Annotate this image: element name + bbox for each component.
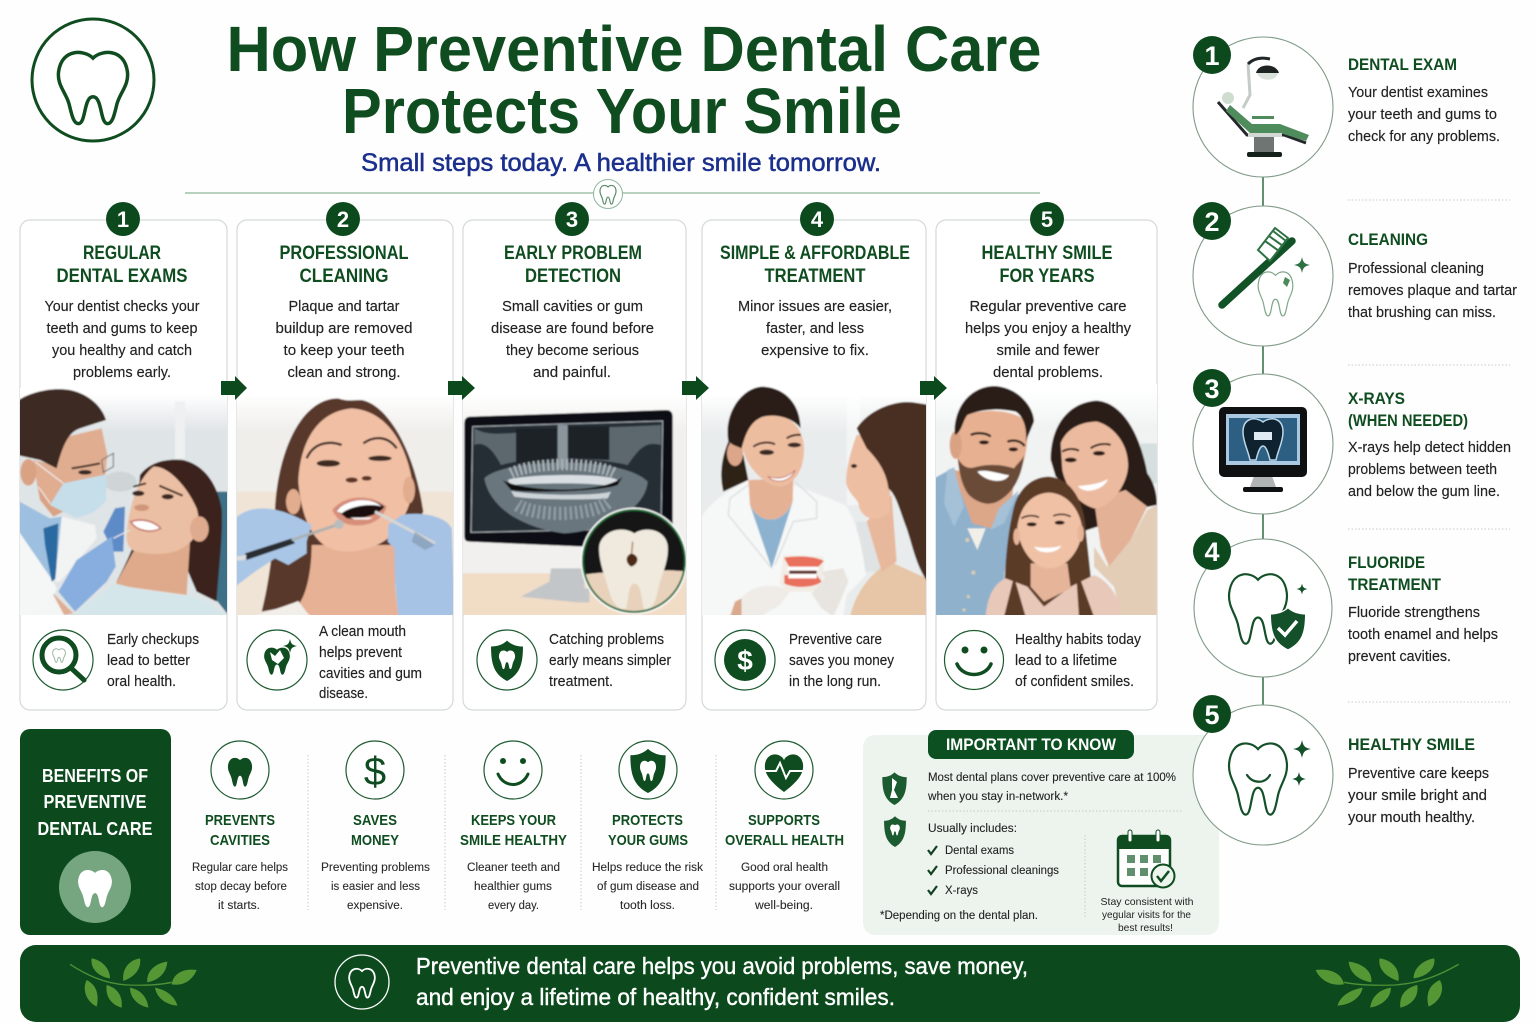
icon: shield 2: [884, 816, 906, 847]
heading: [280, 243, 409, 287]
benefit: keeps your smile healthy: [460, 741, 567, 912]
text: DENTAL EXAM: [1348, 55, 1457, 74]
note: disease.: [319, 686, 368, 702]
benefit: keeps your smile healthy: SMILE HEALTHY: [460, 832, 567, 849]
benefit: saves money: MONEY: [351, 832, 399, 849]
number badge 4: 4: [811, 207, 824, 232]
panel: important to know: Usually includes:: [928, 821, 1017, 835]
panel: important to know: [863, 730, 1219, 935]
step 4 fluoride treatment: [1193, 532, 1498, 677]
number badge: 2: [1204, 207, 1220, 237]
body text: [738, 298, 892, 359]
text: (WHEN NEEDED): [1348, 411, 1468, 430]
checklist: Professional cleanings: [945, 863, 1059, 877]
text: stay consistent: Stay consistent with: [1100, 896, 1194, 908]
note: lead to a lifetime: [1015, 653, 1117, 669]
arrow 1: [221, 376, 247, 400]
icon: tooth circle: [335, 955, 389, 1009]
benefit: prevents cavities: it starts.: [218, 898, 260, 912]
footer text: and enjoy a lifetime of healthy, confident smiles.: [416, 984, 895, 1010]
icon: dental chair: [1218, 58, 1309, 157]
text: your mouth healthy.: [1348, 810, 1475, 826]
note: Catching problems: [549, 632, 664, 648]
body text: faster, and less: [766, 320, 864, 337]
heading: DETECTION: [525, 266, 621, 287]
step 3 x-rays: [1193, 369, 1511, 514]
benefit: keeps your smile healthy: healthier gums: [474, 879, 552, 893]
icon: dollar: $: [737, 645, 753, 676]
number badge: [1193, 532, 1231, 570]
number badge 3: 3: [566, 207, 578, 232]
icon: magnifier: [33, 630, 93, 690]
text: CLEANING: [1348, 230, 1428, 249]
arrow 2: [448, 376, 475, 400]
photo: dentist showing dental model: [700, 385, 930, 618]
icon: smiling tooth: [1229, 740, 1311, 815]
text: X-rays help detect hidden: [1348, 440, 1511, 456]
benefit: saves money: $: [364, 750, 386, 794]
body text: they become serious: [506, 342, 639, 359]
text: [1348, 230, 1517, 321]
icon: shield 1: [882, 772, 907, 805]
icon: tooth with sparkle: [247, 630, 307, 690]
benefit: protects your gums: of gum disease and: [597, 879, 699, 893]
heading: [56, 243, 188, 287]
benefit: prevents cavities: Regular care helps: [192, 860, 288, 874]
number badge: 5: [1204, 700, 1220, 730]
heading: [504, 243, 642, 287]
body text: Small cavities or gum: [502, 298, 643, 315]
subtitle: Small steps today. A healthier smile tomorrow.: [361, 149, 881, 177]
panel: step 2 professional cleaning: [235, 202, 455, 710]
body text: Minor issues are easier,: [738, 298, 892, 315]
benefit: keeps your smile healthy: KEEPS YOUR: [471, 812, 556, 829]
number badge 1: 1: [117, 207, 129, 232]
icon: shield tooth: [477, 630, 537, 690]
note: oral health.: [107, 674, 176, 690]
text: [1348, 389, 1511, 500]
panel: benefits of preventive dental care: [20, 729, 171, 935]
text: Your dentist examines: [1348, 85, 1488, 101]
icon: smiley: [944, 630, 1004, 690]
checklist: [928, 843, 1059, 897]
body text: [276, 298, 412, 381]
icon: leaves right: [1316, 958, 1459, 1008]
text: tooth enamel and helps: [1348, 627, 1498, 643]
benefit: supports overall health: Good oral health: [741, 860, 828, 874]
note: A clean mouth: [319, 624, 406, 640]
note: [107, 632, 199, 690]
benefit: protects your gums: YOUR GUMS: [608, 832, 688, 849]
text: and below the gum line.: [1348, 484, 1500, 500]
text: Fluoride strengthens: [1348, 605, 1480, 621]
note: helps prevent: [319, 645, 402, 661]
benefit: saves money: is easier and less: [331, 879, 420, 893]
number badge: 4: [1204, 537, 1220, 567]
body text: clean and strong.: [288, 364, 400, 381]
body text: teeth and gums to keep: [46, 320, 198, 337]
text: stay consistent: best results!: [1118, 922, 1173, 934]
icon: tooth and shield: [1229, 574, 1308, 650]
title: [226, 13, 1042, 147]
panel: step 4 simple and affordable treatment: [700, 202, 930, 710]
body text: [965, 298, 1131, 381]
icon: toothbrush and tooth: [1222, 228, 1310, 316]
note: [549, 632, 671, 690]
benefit: supports overall health: supports your overall: [729, 879, 840, 893]
heading: HEALTHY SMILE: [982, 243, 1112, 264]
heading: PROFESSIONAL: [280, 243, 409, 264]
benefit: saves money: SAVES: [353, 812, 397, 829]
body text: Your dentist checks your: [44, 298, 200, 315]
number badge: [1193, 202, 1231, 240]
body text: buildup are removed: [276, 320, 412, 337]
pill heading: [928, 730, 1134, 759]
heading: DENTAL EXAMS: [56, 266, 188, 287]
body text: problems early.: [73, 364, 171, 381]
benefit: keeps your smile healthy: every day.: [488, 898, 539, 912]
number badge 3: [555, 202, 589, 236]
benefit: supports overall health: [725, 741, 844, 912]
note: early means simpler: [549, 653, 671, 669]
note: Healthy habits today: [1015, 632, 1142, 648]
photo: smiling patient cleaning: [235, 385, 455, 618]
number badge 5: 5: [1041, 207, 1053, 232]
number badge: [1193, 695, 1231, 733]
benefit: protects your gums: tooth loss.: [620, 898, 675, 912]
body text: you healthy and catch: [52, 342, 192, 359]
photo: smiling family: [934, 380, 1164, 620]
body text: disease are found before: [491, 320, 654, 337]
benefit: prevents cavities: [192, 741, 288, 912]
checklist: Dental exams: [945, 843, 1014, 857]
connector line: [1262, 170, 1264, 710]
number badge 4: [800, 202, 834, 236]
text: removes plaque and tartar: [1348, 283, 1517, 299]
benefit: saves money: expensive.: [347, 898, 403, 912]
text: [1348, 735, 1489, 826]
panel: step 3 early problem detection: [461, 202, 691, 710]
footer banner: [20, 945, 1520, 1022]
text: check for any problems.: [1348, 129, 1500, 145]
benefit: prevents cavities: PREVENTS: [205, 812, 275, 829]
divider with tooth: [185, 180, 1040, 208]
heading: FOR YEARS: [1000, 266, 1094, 287]
benefit: protects your gums: PROTECTS: [612, 812, 683, 829]
arrow 4: [920, 376, 947, 400]
body text: Plaque and tartar: [288, 298, 400, 315]
text: stay consistent: [1100, 896, 1194, 934]
icon: white tooth: [59, 851, 131, 923]
benefit: prevents cavities: CAVITIES: [210, 832, 270, 849]
body text: to keep your teeth: [284, 342, 404, 359]
panel: step 1 regular dental exams: [17, 202, 233, 710]
note: [319, 624, 422, 702]
icon: tooth logo: [32, 19, 154, 141]
text: your teeth and gums to: [1348, 107, 1497, 123]
text: X-RAYS: [1348, 389, 1405, 408]
panel: important to know: *Depending on the dental plan.: [880, 908, 1038, 922]
number badge 2: [326, 202, 360, 236]
icon: x-ray monitor: [1219, 407, 1307, 492]
title: Protects Your Smile: [342, 75, 902, 147]
arrow 3: [682, 376, 709, 400]
icon: leaves left: [70, 958, 197, 1008]
text: stay consistent: yegular visits for the: [1102, 909, 1191, 921]
title: How Preventive Dental Care: [226, 13, 1042, 85]
number badge 1: [106, 202, 140, 236]
pill heading: IMPORTANT TO KNOW: [946, 735, 1117, 754]
benefit: keeps your smile healthy: Cleaner teeth and: [467, 860, 560, 874]
benefit: protects your gums: [592, 741, 704, 912]
benefit: supports overall health: well-being.: [754, 898, 813, 912]
note: of confident smiles.: [1015, 674, 1134, 690]
heading: [720, 243, 910, 287]
panel: benefits of preventive dental care: DENTAL CARE: [38, 819, 152, 839]
heading: [982, 243, 1112, 287]
step 5 healthy smile: [1193, 695, 1489, 845]
text: coverage: Most dental plans cover preventive care at 100%: [928, 770, 1176, 784]
heading: CLEANING: [300, 266, 388, 287]
text: Preventive care keeps: [1348, 766, 1489, 782]
icon: calendar: [1118, 830, 1174, 888]
step 1 dental exam: [1193, 36, 1500, 177]
note: cavities and gum: [319, 666, 422, 682]
note: [789, 632, 895, 690]
body text: [491, 298, 654, 381]
text: HEALTHY SMILE: [1348, 735, 1475, 754]
text: prevent cavities.: [1348, 649, 1451, 665]
note: in the long run.: [789, 674, 881, 690]
benefit: prevents cavities: stop decay before: [195, 879, 287, 893]
body text: smile and fewer: [996, 342, 1100, 359]
panel: benefits of preventive dental care: BENEFITS OF: [42, 766, 148, 786]
benefit: protects your gums: Helps reduce the risk: [592, 860, 704, 874]
body text: helps you enjoy a healthy: [965, 320, 1131, 337]
number badge: [1193, 36, 1231, 74]
note: Preventive care: [789, 632, 882, 648]
number badge 2: 2: [337, 207, 349, 232]
number badge 5: [1030, 202, 1064, 236]
text: your smile bright and: [1348, 788, 1487, 804]
benefit: saves money: [321, 741, 430, 912]
footer text: Preventive dental care helps you avoid problems, save money,: [416, 953, 1028, 979]
body text: and painful.: [533, 364, 611, 381]
icon: dollar: [715, 630, 775, 690]
text: [1348, 55, 1500, 145]
number badge: 1: [1204, 41, 1220, 71]
text: Professional cleaning: [1348, 261, 1484, 277]
note: treatment.: [549, 674, 613, 690]
heading: SIMPLE & AFFORDABLE: [720, 243, 910, 264]
benefit: supports overall health: SUPPORTS: [748, 812, 820, 829]
text: [1348, 553, 1498, 665]
footer text: [416, 953, 1028, 1010]
heading: TREATMENT: [764, 266, 866, 287]
number badge: [1193, 369, 1231, 407]
text: TREATMENT: [1348, 575, 1442, 594]
photo: dentist examining patient: [17, 385, 233, 618]
text: problems between teeth: [1348, 462, 1497, 478]
text: coverage: [927, 770, 1176, 803]
panel: benefits of preventive dental care: PREVENTIVE: [44, 792, 146, 812]
body text: [44, 298, 200, 381]
number badge: 3: [1204, 374, 1220, 404]
body text: expensive to fix.: [761, 342, 869, 359]
note: [1015, 632, 1142, 690]
text: FLUORIDE: [1348, 553, 1425, 572]
step 2 cleaning: [1193, 202, 1517, 346]
text: that brushing can miss.: [1348, 305, 1496, 321]
note: Early checkups: [107, 632, 199, 648]
benefit: saves money: Preventing problems: [321, 860, 430, 874]
panel: step 5 healthy smile for years: [934, 202, 1164, 710]
body text: Regular preventive care: [970, 298, 1126, 315]
heading: REGULAR: [83, 243, 161, 264]
benefit: supports overall health: OVERALL HEALTH: [725, 832, 844, 849]
text: coverage: when you stay in-network.*: [927, 789, 1068, 803]
checklist: X-rays: [945, 883, 978, 897]
heading: EARLY PROBLEM: [504, 243, 642, 264]
body text: dental problems.: [993, 364, 1103, 381]
photo: x-ray on monitor: [461, 385, 691, 618]
note: saves you money: [789, 653, 895, 669]
note: lead to better: [107, 653, 190, 669]
